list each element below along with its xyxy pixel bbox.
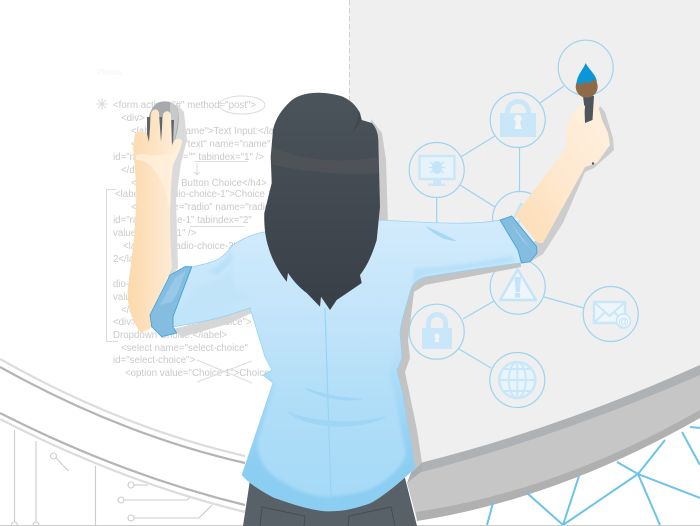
code listing: 2</label> <box>113 254 153 265</box>
code listing <box>97 68 308 379</box>
icon node: small padlock <box>409 304 464 359</box>
left sleeve cuff <box>150 267 192 337</box>
code listing: id="radio-choice-1" tabindex="2" <box>113 215 252 226</box>
code listing: value="choice-1" /> <box>113 228 197 239</box>
cast shadows of the figure <box>168 103 614 472</box>
code listing: <h4>Radio Button Choice</h4> <box>131 178 267 189</box>
icon node: envelope with at sign: @ <box>618 316 629 328</box>
code annotations <box>96 96 265 383</box>
code listing: <div> <box>121 113 145 124</box>
code listing: </div> <box>121 305 148 316</box>
blue triangulated network <box>487 427 700 525</box>
dashed panel edge <box>348 0 350 110</box>
icon node: paperclip <box>492 192 548 246</box>
code listing: <option value="Choice 1">Choice <box>125 368 270 379</box>
left arm and hand <box>128 109 182 333</box>
computer mouse <box>147 101 179 145</box>
code listing: Dropdown Choice:</label> <box>113 330 228 341</box>
code listing: </div> <box>121 165 148 176</box>
code listing: <label for="radio-choice-1">Choice 1</label> <box>115 189 308 200</box>
hair <box>264 93 380 310</box>
icon node: monitor with bug <box>409 142 464 198</box>
icon node: paintbrush ring <box>558 40 613 95</box>
network connectors <box>437 86 584 368</box>
icon node: envelope with at sign <box>583 286 638 342</box>
icon node: padlock with keyhole <box>490 92 545 148</box>
curved rail lines <box>0 359 245 512</box>
right sleeve cuff <box>500 216 537 263</box>
paintbrush <box>576 63 598 165</box>
code listing: value <box>113 292 136 303</box>
code listing: <input type="text" name="name" <box>131 139 271 150</box>
code listing: Please <box>97 68 122 77</box>
code listing: dio-choice <box>113 279 157 290</box>
trousers <box>243 478 417 526</box>
code listing: <input type="radio" name="radio-choice" <box>131 202 306 213</box>
shirt <box>173 220 521 511</box>
code listing: <label for="name">Text Input:</label> <box>131 126 293 137</box>
code listing: id="name" value="" tabindex="1" /> <box>113 152 264 163</box>
code listing: <select name="select-choice" <box>121 343 249 354</box>
panel thickness band <box>407 365 700 521</box>
circuit traces <box>0 430 700 526</box>
code listing: <div><label for="select-choice"> <box>113 317 252 328</box>
right arm and hand <box>515 102 610 243</box>
panel: grey canvas <box>349 0 700 463</box>
icon node: globe <box>490 352 545 408</box>
icon node: warning triangle <box>490 259 545 314</box>
code listing: <label for="radio-choice-2">Choice <box>123 241 273 252</box>
code listing: <form action="#" method="post"> <box>113 100 256 111</box>
code listing: id="select-choice"> <box>113 355 196 366</box>
